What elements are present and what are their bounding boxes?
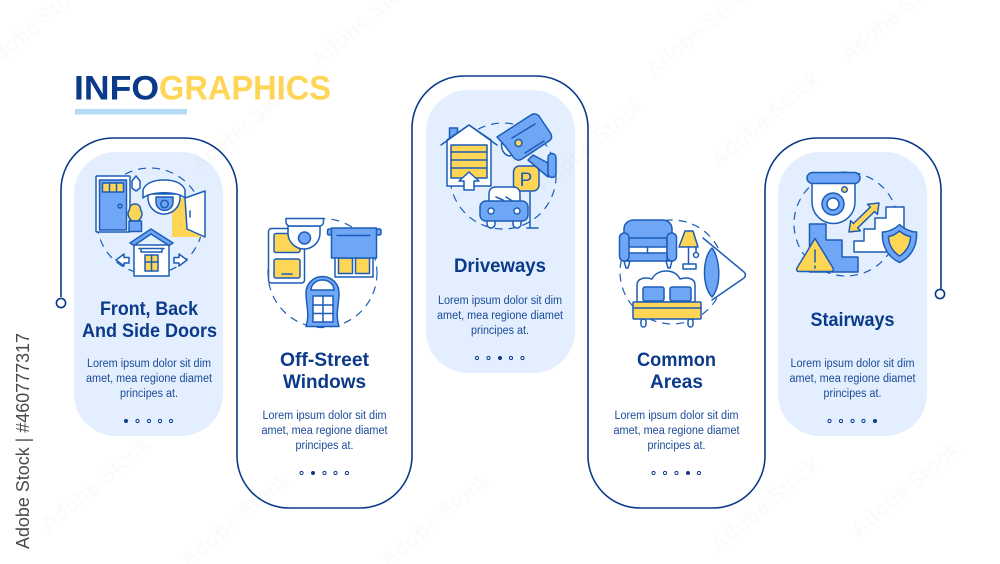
text block: doors: amet, mea regione diamet <box>86 373 213 385</box>
panel backgrounds <box>74 90 927 436</box>
icon: driveways <box>441 114 556 229</box>
pagination dots: stairways <box>828 419 877 423</box>
icon: driveways: P <box>520 170 532 191</box>
text block: driveways: principes at. <box>471 325 529 337</box>
heading: common areas <box>637 350 716 393</box>
pagination dots: common areas <box>652 471 701 475</box>
watermark: Adobe Stock <box>706 66 825 172</box>
watermark: Adobe Stock <box>846 436 965 542</box>
watermark: Adobe Stock <box>36 431 155 537</box>
icon: windows <box>268 218 381 328</box>
pagination dots: driveways <box>475 356 524 360</box>
pagination dots: doors <box>124 419 173 423</box>
text block: common areas: principes at. <box>648 440 706 452</box>
text block: doors <box>86 358 213 400</box>
heading: front, back and side doors: Front, Back <box>100 299 198 320</box>
text block: common areas: amet, mea regione diamet <box>614 425 740 437</box>
heading: off-street windows <box>280 350 370 393</box>
heading: front, back and side doors: And Side Doors <box>82 321 217 342</box>
text block: stairways: Lorem ipsum dolor sit dim <box>790 358 914 370</box>
text block: windows: principes at. <box>296 440 354 452</box>
connecting outline <box>56 76 945 508</box>
text block: windows: amet, mea regione diamet <box>262 425 388 437</box>
heading: common areas: Areas <box>650 372 703 393</box>
title <box>74 70 331 114</box>
heading: off-street windows: Off-Street <box>280 350 370 371</box>
title: GRAPHICS <box>159 70 331 108</box>
text block: common areas <box>614 410 740 452</box>
watermark: Adobe Stock <box>706 451 825 557</box>
text block: common areas: Lorem ipsum dolor sit dim <box>614 410 738 422</box>
pagination dots: windows <box>300 471 349 475</box>
stock id vertical text: Adobe Stock | #460777317 <box>12 333 33 549</box>
heading: driveways: Driveways <box>454 256 546 277</box>
heading: off-street windows: Windows <box>283 372 366 393</box>
icon: common areas <box>620 220 746 327</box>
text block: stairways: amet, mea regione diamet <box>790 373 916 385</box>
text block: driveways: Lorem ipsum dolor sit dim <box>438 295 562 307</box>
watermark: Adobe Stock <box>186 71 305 177</box>
heading: stairways: Stairways <box>810 310 894 331</box>
title: INFO <box>74 70 159 108</box>
text block: doors: principes at. <box>120 388 178 400</box>
text block: windows: Lorem ipsum dolor sit dim <box>262 410 386 422</box>
text block: windows <box>262 410 388 452</box>
text block: stairways: principes at. <box>824 388 882 400</box>
icon: doors <box>96 168 205 276</box>
text block: driveways: amet, mea regione diamet <box>437 310 564 322</box>
text block: stairways <box>790 358 916 400</box>
text block: driveways <box>437 295 564 337</box>
text block: doors: Lorem ipsum dolor sit dim <box>87 358 211 370</box>
icon: stairways <box>794 172 917 276</box>
heading: front, back and side doors <box>82 299 217 342</box>
heading: common areas: Common <box>637 350 716 371</box>
watermark: Adobe Stock <box>531 91 650 197</box>
